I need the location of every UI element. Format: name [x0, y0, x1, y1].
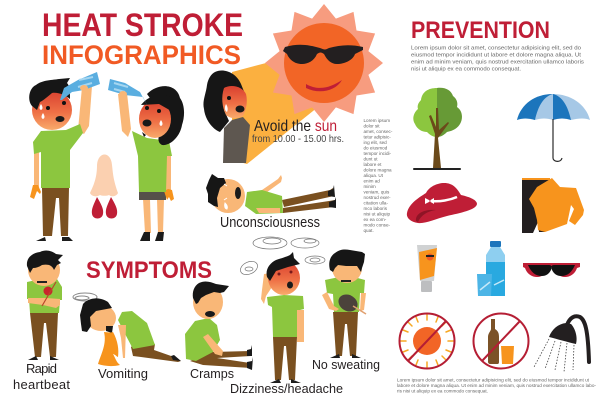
bottom lorem text: ris nisi ut aliquip ex ea commodo consequat. — [397, 388, 488, 394]
title: INFOGRAPHICS — [42, 40, 241, 70]
icon: sunglasses — [523, 263, 580, 277]
avoid the sun caption: Avoid the sun — [254, 118, 337, 135]
narrow lorem text column: ing elit, sed — [364, 140, 387, 145]
narrow lorem text column: nostrud exer- — [364, 195, 391, 200]
avoid the sun caption: from 10.00 - 15.00 hrs. — [252, 133, 344, 145]
icon: long sleeve clothing — [522, 178, 584, 233]
bottom lorem text: labore et dolore magna aliqua. Ut enim ad minim veniam, quis nostrud exercitation ullamco labo- — [397, 383, 596, 388]
title — [42, 7, 243, 70]
dizziness figure — [261, 252, 304, 383]
title: HEAT STROKE — [42, 7, 243, 43]
woman pouring water — [108, 79, 184, 241]
unconsciousness label: Unconsciousness — [220, 215, 320, 231]
sun rays beam — [232, 63, 318, 164]
narrow lorem text column: ex ea com- — [364, 217, 387, 222]
rapid heartbeat label: heartbeat — [13, 377, 70, 392]
icon: no alcohol — [474, 314, 528, 368]
cramps figure — [185, 281, 253, 370]
icon: shower — [534, 316, 589, 372]
symptoms heading: SYMPTOMS — [86, 257, 212, 284]
icon: sunscreen tube — [417, 245, 437, 292]
narrow lorem text column: aliqua. Ut — [364, 173, 384, 178]
narrow lorem text column: tempor incidi- — [364, 151, 392, 156]
narrow lorem text column: citation ulla- — [364, 200, 388, 206]
narrow lorem text column: dunt ut — [364, 156, 378, 162]
narrow lorem text column: minim — [364, 184, 376, 189]
narrow lorem text column: do eiusmod — [364, 146, 388, 150]
avoid the sun caption — [252, 118, 344, 145]
narrow lorem text column: Lorem ipsum — [364, 118, 390, 123]
narrow lorem text column: amet, consec- — [364, 129, 393, 134]
icon: umbrella — [517, 94, 590, 161]
narrow lorem text column: enim ad — [364, 178, 380, 184]
rapid heartbeat label: Rapid — [26, 361, 57, 376]
narrow lorem text column: tetur adipisic- — [364, 134, 391, 140]
prevention paragraph: eiusmod tempor incididunt ut labore et dolore magna aliqua. Ut — [411, 52, 582, 58]
narrow lorem text column: dolor sit — [364, 124, 380, 128]
narrow lorem text column: mco laboris — [364, 206, 388, 211]
prevention paragraph: Lorem ipsum dolor sit amet, consectetur adipisicing elit, sed do — [411, 46, 581, 52]
prevention paragraph: enim ad minim veniam, quis nostrud exercitation ullamco laboris — [411, 60, 584, 66]
icon: red hat — [407, 183, 477, 223]
narrow lorem text column: modo conse- — [364, 222, 391, 228]
cramps label: Cramps — [190, 367, 234, 381]
no sweating label: No sweating — [312, 358, 380, 372]
rapid heartbeat label — [13, 361, 70, 392]
narrow lorem text column: veniam, quis — [364, 190, 390, 194]
icon: no direct sun — [400, 314, 454, 368]
prevention heading: PREVENTION — [411, 17, 550, 44]
unconscious man — [206, 174, 336, 214]
icon: tree — [413, 88, 462, 170]
prevention paragraph — [411, 46, 584, 72]
narrow lorem text column: labore et — [364, 162, 382, 167]
woman under the sun — [203, 70, 250, 163]
vomiting figure — [73, 293, 181, 366]
narrow lorem text column — [364, 118, 393, 233]
dizziness label: Dizziness/headache — [230, 382, 343, 396]
no sweating figure — [322, 249, 366, 358]
prevention paragraph: nisi ut aliquip ex ea commodo consequat. — [411, 66, 521, 72]
icon: water bottle and glass — [477, 241, 505, 296]
rapid heartbeat figure — [27, 251, 63, 360]
icon: sun with sunglasses — [265, 4, 383, 122]
narrow lorem text column: nisi ut aliquip — [364, 212, 391, 216]
icon: nosebleed — [90, 154, 118, 218]
bottom lorem text — [397, 378, 596, 394]
man pouring water — [29, 72, 100, 241]
bottom lorem text: Lorem ipsum dolor sit amet, consectetur adipisicing elit, sed do eiusmod tempor incididunt ut — [397, 378, 590, 382]
narrow lorem text column: dolore magna — [364, 168, 392, 172]
dizziness swirls — [238, 237, 325, 277]
narrow lorem text column: quat. — [364, 228, 374, 233]
vomiting label: Vomiting — [98, 367, 148, 381]
